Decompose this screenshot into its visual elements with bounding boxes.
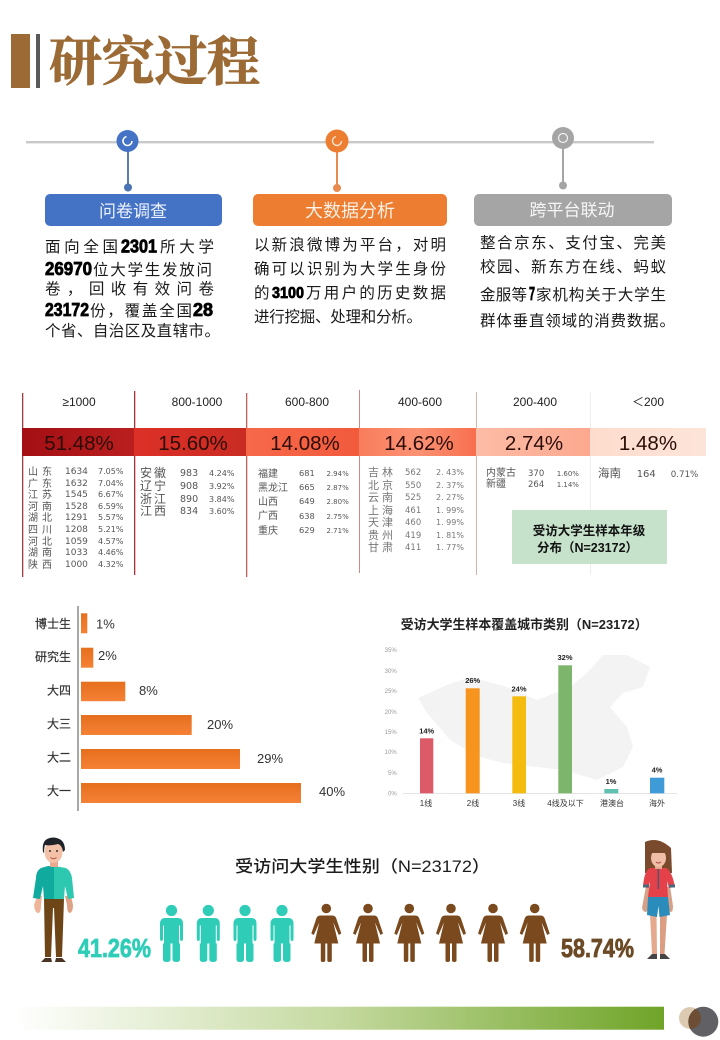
column 1 provinces: 江苏 <box>28 488 52 501</box>
column 1 provinces: 湖北 <box>28 512 52 524</box>
category labels: 1线 <box>420 798 432 808</box>
y axis labels: 10% <box>385 750 397 756</box>
column 4 provinces: 411 <box>405 543 421 553</box>
column 3 provinces: 2.94% <box>326 470 349 478</box>
column headers: 600-800 <box>285 395 329 409</box>
value labels: 24% <box>511 684 527 694</box>
footer gradient bar <box>15 1007 664 1030</box>
column 2 provinces: 3.92% <box>209 482 235 491</box>
icon: overlapping circles <box>679 1007 718 1037</box>
bar chart: grade distribution: 40% <box>319 784 345 799</box>
percentage band: 14.62% <box>384 432 454 455</box>
percentage band <box>22 428 706 456</box>
percentage band: 2.74% <box>505 432 563 455</box>
y axis labels: 35% <box>385 648 397 654</box>
text block: cross-platform: 家机构关于大学生 <box>536 286 666 304</box>
panel: province table <box>22 390 706 577</box>
column 4 provinces: 461 <box>405 506 421 516</box>
y axis labels: 30% <box>385 669 397 675</box>
heading: cross-platform: 跨平台联动 <box>530 201 614 220</box>
icon: man illustration <box>33 838 74 962</box>
text block: survey: 卷，回收有效问卷 <box>45 280 214 298</box>
column 6 provinces: 海南 <box>598 466 621 480</box>
text block: survey: 位大学生发放问 <box>93 261 212 279</box>
column 2 provinces: 890 <box>180 494 198 505</box>
category labels: 3线 <box>513 798 525 808</box>
text block: big data: 进行挖掘、处理和分析。 <box>254 308 422 326</box>
column 5 provinces <box>486 466 579 490</box>
timeline <box>26 127 654 192</box>
column 1 provinces: 1000 <box>65 560 88 570</box>
column 4 provinces: 天津 <box>368 516 393 529</box>
column headers: 200-400 <box>513 395 557 409</box>
column 1 provinces: 4.57% <box>98 537 124 546</box>
column 3 provinces: 重庆 <box>258 524 278 537</box>
heading: survey: 问卷调查 <box>99 202 167 221</box>
bar chart: grade distribution: 29% <box>257 751 283 766</box>
column 4 provinces: 2. 43% <box>436 468 464 477</box>
bars <box>420 665 664 793</box>
column 5 provinces: 内蒙古 <box>486 466 516 479</box>
text block: survey: 个省、自治区及直辖市。 <box>45 322 220 340</box>
column 3 provinces: 681 <box>299 468 315 478</box>
column 4 provinces: 550 <box>405 481 421 491</box>
category labels: 2线 <box>467 798 479 808</box>
category labels: 4线及以下 <box>547 798 584 808</box>
heading: big data <box>253 194 447 226</box>
bar chart: grade distribution: 大二 <box>47 750 71 764</box>
heading: gender: 受访问大学生性别（N=23172） <box>235 856 490 876</box>
column 2 provinces <box>140 465 235 518</box>
column 2 provinces: 3.84% <box>209 495 235 504</box>
bar chart: grade distribution: 大三 <box>47 717 71 731</box>
column 4 provinces: 北京 <box>368 478 393 492</box>
bar chart: grade distribution: 研究生 <box>35 649 71 664</box>
column 4 provinces: 1. 99% <box>436 518 464 527</box>
bar chart: grade distribution: 大四 <box>47 684 71 698</box>
column 4 provinces: 562 <box>405 468 421 478</box>
column 1 provinces: 4.46% <box>98 548 124 557</box>
text block: survey: 面向全国 <box>45 238 118 256</box>
text block: big data: 的 <box>254 284 270 302</box>
column 3 provinces: 2.80% <box>326 498 349 506</box>
text block: cross-platform: 整合京东、支付宝、完美 <box>480 234 666 252</box>
column 1 provinces: 5.57% <box>98 513 124 522</box>
y axis labels <box>385 648 397 798</box>
text block: cross-platform: 校园、新东方在线、蚂蚁 <box>480 258 666 276</box>
panel: survey <box>45 194 222 340</box>
column 3 provinces: 广西 <box>258 510 278 522</box>
column 6 provinces: 0.71% <box>671 470 698 480</box>
column 5 provinces: 新疆 <box>486 477 506 490</box>
heading: big data: 大数据分析 <box>305 201 395 221</box>
column 3 provinces: 665 <box>299 482 315 492</box>
bar chart: grade distribution: 20% <box>207 717 233 732</box>
text block: big data: 以新浪微博为平台，对明 <box>254 236 446 254</box>
column 1 provinces: 河南 <box>28 500 52 513</box>
column 6 provinces: 164 <box>637 469 656 480</box>
column 1 provinces: 河北 <box>28 536 52 548</box>
text block: big data: 3100 <box>272 285 304 302</box>
column 1 provinces: 山东 <box>28 465 52 478</box>
value labels: 32% <box>557 653 573 662</box>
column 4 provinces: 2. 37% <box>436 481 464 490</box>
text block: survey: 26970 <box>45 259 92 279</box>
column 3 provinces: 629 <box>299 525 315 535</box>
percentage band: 14.08% <box>270 432 340 455</box>
text block: cross-platform: 7 <box>529 284 535 304</box>
column 3 provinces: 2.87% <box>326 484 349 492</box>
column 4 provinces: 上海 <box>368 503 393 517</box>
column 6 provinces <box>598 466 698 480</box>
column 1 provinces: 1033 <box>65 548 88 558</box>
column 4 provinces: 贵州 <box>368 529 393 542</box>
text block: big data: 万用户的历史数据 <box>306 284 446 302</box>
column 3 provinces: 山西 <box>258 496 278 508</box>
column 1 provinces: 1634 <box>65 467 88 477</box>
column headers <box>62 395 664 409</box>
icon: survey node <box>116 130 138 192</box>
column headers: 800-1000 <box>172 395 223 409</box>
y axis labels: 20% <box>385 710 397 716</box>
text block: cross-platform: 群体垂直领域的消费数据。 <box>480 312 675 330</box>
value labels: 1% <box>606 777 617 786</box>
column 4 provinces: 419 <box>405 531 421 541</box>
column 3 provinces <box>258 467 349 537</box>
column 4 provinces: 吉林 <box>368 465 393 479</box>
percentage band: 51.48% <box>44 432 114 455</box>
column 4 provinces: 1. 77% <box>436 543 464 552</box>
text block: survey: 23172 <box>45 300 89 320</box>
bar chart: grade distribution: 博士生 <box>35 616 71 631</box>
column 4 provinces: 460 <box>405 518 421 528</box>
column 4 provinces <box>368 465 464 554</box>
bar chart: grade distribution: 大一 <box>47 784 71 798</box>
text block: cross-platform <box>480 234 675 330</box>
title: 研究过程 <box>49 20 260 96</box>
text block: survey: 份，覆盖全国 <box>90 302 192 320</box>
y axis labels: 0% <box>388 792 397 798</box>
text block: survey: 28 <box>193 300 213 320</box>
category labels: 海外 <box>649 798 665 808</box>
column 2 provinces: 安徽 <box>140 465 166 480</box>
stat: male share: 41.26% <box>78 933 151 963</box>
column 1 provinces: 湖南 <box>28 546 52 559</box>
column 3 provinces: 638 <box>299 511 315 521</box>
bar chart: grade distribution: 2% <box>98 648 117 663</box>
callout: grade chart title: 受访大学生样本年级 <box>533 523 646 538</box>
chart title: 受访大学生样本覆盖城市类别（N=23172） <box>401 617 648 632</box>
column 5 provinces: 1.60% <box>557 470 579 478</box>
column 1 provinces: 广东 <box>28 477 52 490</box>
column 1 provinces: 1528 <box>65 502 88 512</box>
column 1 provinces: 4.32% <box>98 560 124 569</box>
bar chart: grade distribution: 8% <box>139 683 158 698</box>
column 5 provinces: 370 <box>528 469 544 479</box>
map of China background <box>418 655 650 780</box>
column 1 provinces: 1291 <box>65 513 88 523</box>
column 1 provinces: 四川 <box>28 525 52 536</box>
heading: survey <box>45 194 222 226</box>
stat: female share: 58.74% <box>561 933 634 963</box>
column 1 provinces: 6.59% <box>98 502 124 511</box>
column 1 provinces: 1208 <box>65 525 88 535</box>
column 4 provinces: 云南 <box>368 491 393 504</box>
text block: big data <box>254 236 446 326</box>
column 4 provinces: 1. 81% <box>436 531 464 540</box>
icon: men pictograms <box>160 905 294 962</box>
column 1 provinces: 7.04% <box>98 479 124 488</box>
value labels: 14% <box>419 726 435 736</box>
column 2 provinces: 浙江 <box>140 492 166 506</box>
column 2 provinces: 983 <box>180 468 198 479</box>
column 1 provinces: 1545 <box>65 490 88 500</box>
column 2 provinces: 辽宁 <box>140 478 166 493</box>
callout: grade chart title: 分布（N=23172） <box>537 540 638 555</box>
category labels: 港澳台 <box>600 798 624 808</box>
icon: woman illustration <box>642 840 675 959</box>
text block: big data: 确可以识别为大学生身份 <box>254 260 446 278</box>
y axis labels: 15% <box>385 730 397 736</box>
column 4 provinces: 1. 99% <box>436 506 464 515</box>
column 1 provinces: 陕西 <box>28 558 52 571</box>
bar chart: grade distribution <box>35 606 345 811</box>
callout: grade chart title <box>512 510 667 564</box>
column 5 provinces: 264 <box>528 480 544 490</box>
column headers: 400-600 <box>398 395 442 409</box>
column 2 provinces: 834 <box>180 506 198 517</box>
bar chart: grade distribution: 1% <box>96 616 115 632</box>
text block: survey: 2301 <box>121 236 157 256</box>
icon: big data node <box>326 130 348 192</box>
column 2 provinces: 江西 <box>140 504 166 518</box>
column 1 provinces <box>28 465 124 571</box>
column 1 provinces: 1059 <box>65 537 88 547</box>
y axis labels: 5% <box>388 771 397 777</box>
value labels: 4% <box>652 766 663 774</box>
text block: survey <box>45 236 220 340</box>
column 3 provinces: 2.75% <box>326 513 349 521</box>
value labels: 26% <box>465 676 481 685</box>
column 2 provinces: 908 <box>180 481 198 492</box>
icon: cross-platform node <box>552 127 574 190</box>
column 4 provinces: 525 <box>405 493 421 503</box>
column 3 provinces: 649 <box>299 496 315 506</box>
column 1 provinces: 7.05% <box>98 467 124 476</box>
category labels <box>420 798 665 808</box>
icon: women pictograms <box>311 904 550 962</box>
heading: cross-platform <box>474 194 672 226</box>
text block: cross-platform: 金服等 <box>480 286 527 304</box>
column 4 provinces: 甘肃 <box>368 541 393 554</box>
percentage band: 1.48% <box>619 432 677 455</box>
text block: survey: 所大学 <box>160 238 214 256</box>
y axis labels: 25% <box>385 689 397 695</box>
column headers: ≥1000 <box>62 395 96 409</box>
bar chart: city tiers <box>385 617 677 808</box>
panel: big data <box>253 194 447 326</box>
column 1 provinces: 6.67% <box>98 490 124 499</box>
column 2 provinces: 3.60% <box>209 507 235 516</box>
column 2 provinces: 4.24% <box>209 469 235 478</box>
column 5 provinces: 1.14% <box>557 481 579 489</box>
column 3 provinces: 黑龙江 <box>258 481 288 494</box>
column 3 provinces: 福建 <box>258 467 278 480</box>
percentage band: 15.60% <box>158 432 228 455</box>
column 4 provinces: 2. 27% <box>436 493 464 502</box>
panel: gender <box>33 838 675 963</box>
column 3 provinces: 2.71% <box>326 527 349 535</box>
column headers: ＜200 <box>632 395 664 409</box>
column 1 provinces: 1632 <box>65 479 88 489</box>
value labels <box>419 653 663 786</box>
panel: cross-platform <box>474 194 675 330</box>
column 1 provinces: 5.21% <box>98 525 124 534</box>
